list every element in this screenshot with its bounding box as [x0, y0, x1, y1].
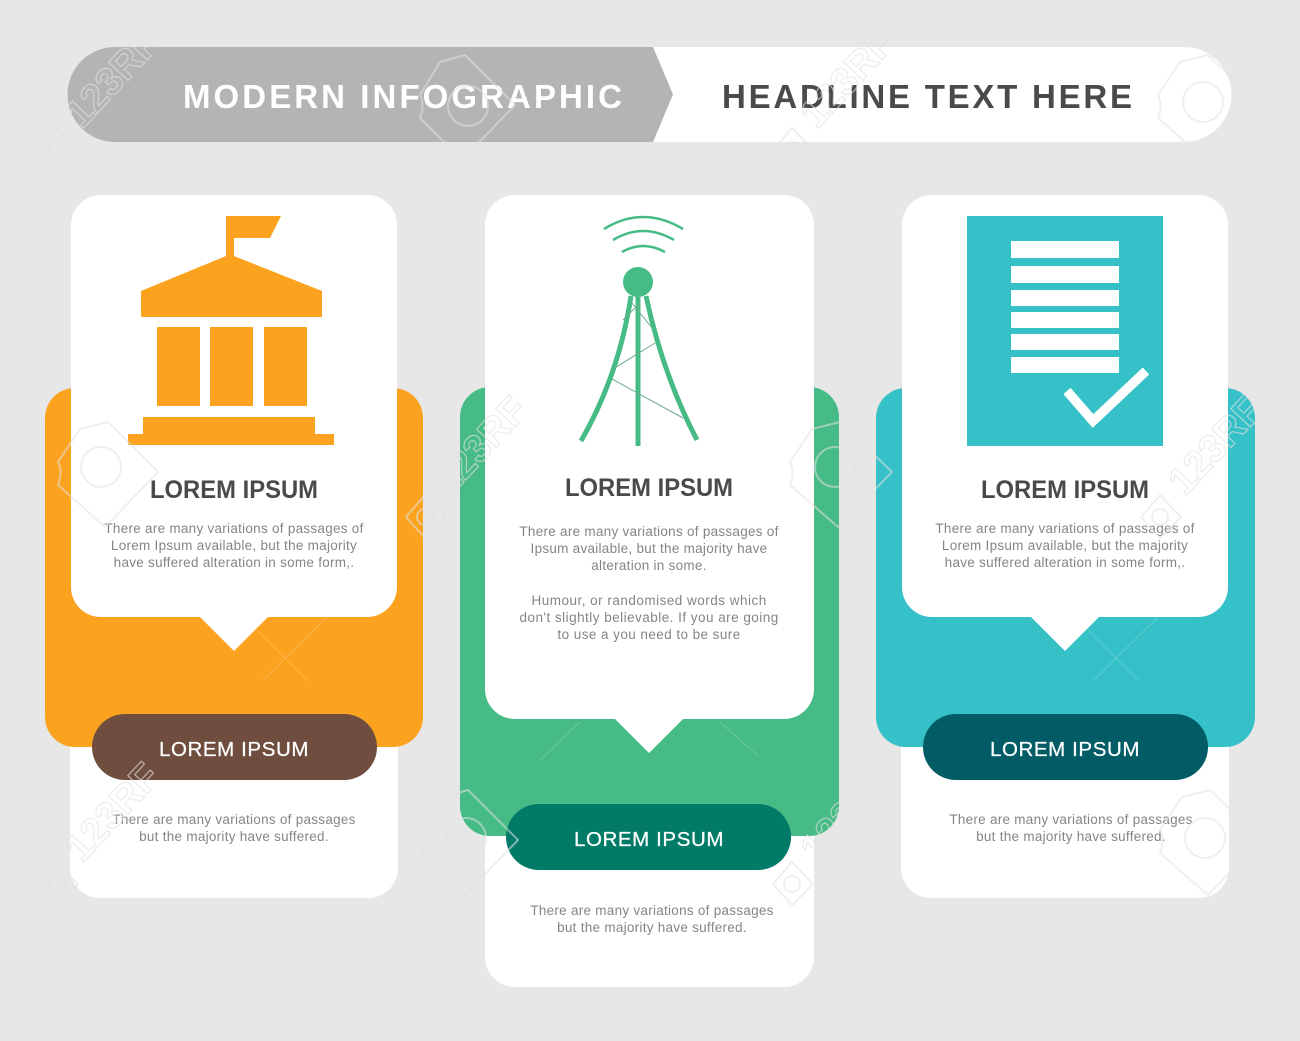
body text: don't slightly believable. If you are going — [520, 610, 778, 625]
lower white card — [485, 790, 814, 987]
header banner — [68, 47, 1232, 142]
body text — [519, 524, 779, 642]
lower white card — [70, 700, 398, 898]
lower text — [530, 903, 774, 935]
upper white callout card — [485, 195, 814, 753]
watermark overlay: 123RF — [792, 21, 903, 136]
lower white card — [901, 700, 1229, 898]
body text — [935, 521, 1195, 570]
header title right: HEADLINE TEXT HERE — [722, 78, 1132, 115]
heading: LOREM IPSUM — [981, 476, 1149, 504]
header title left: MODERN INFOGRAPHIC — [183, 78, 622, 115]
watermark overlay: 123RF — [57, 755, 168, 870]
body text: Humour, or randomised words which — [532, 593, 766, 608]
body text: alteration in some. — [591, 558, 707, 573]
upper white callout card — [71, 195, 397, 651]
lower text: but the majority have suffered. — [557, 920, 747, 935]
dark teal pill button — [923, 714, 1208, 780]
brown pill button — [92, 714, 377, 780]
lower text: There are many variations of passages — [112, 812, 356, 827]
watermark overlay: 123RF — [425, 388, 536, 503]
heading: LOREM IPSUM — [150, 476, 318, 504]
body text: There are many variations of passages of — [519, 524, 779, 539]
lower text — [112, 812, 356, 844]
lower text: but the majority have suffered. — [139, 829, 329, 844]
lower text: but the majority have suffered. — [976, 829, 1166, 844]
lower text: There are many variations of passages — [949, 812, 1193, 827]
watermark overlay: 123RF — [1160, 388, 1271, 503]
brown pill button: LOREM IPSUM — [159, 738, 309, 761]
panel: left column — [45, 195, 423, 898]
icon: radio tower with signal waves — [581, 217, 697, 446]
dark teal pill button: LOREM IPSUM — [990, 738, 1140, 761]
icon: government building with flag — [128, 216, 334, 445]
header left grey arrow pill — [68, 47, 673, 142]
watermark overlay: 123RF — [57, 21, 168, 136]
body text: Ipsum available, but the majority have — [531, 541, 767, 556]
icon: document with check mark — [967, 216, 1163, 446]
upper white callout card — [902, 195, 1228, 651]
body text: There are many variations of passages of — [104, 521, 364, 536]
dark green pill button: LOREM IPSUM — [574, 828, 724, 851]
panel: middle column — [460, 195, 839, 987]
panel: right column — [876, 195, 1255, 898]
dark green pill button — [506, 804, 791, 870]
lower text: There are many variations of passages — [530, 903, 774, 918]
header right white pill — [640, 47, 1232, 142]
green backing panel — [460, 387, 839, 836]
body text — [104, 521, 364, 570]
body text: have suffered alteration in some form,. — [945, 555, 1185, 570]
body text: There are many variations of passages of — [935, 521, 1195, 536]
heading: LOREM IPSUM — [565, 474, 733, 502]
body text: have suffered alteration in some form,. — [114, 555, 354, 570]
body text: Lorem Ipsum available, but the majority — [942, 538, 1188, 553]
orange backing panel — [45, 388, 423, 747]
body text: to use a you need to be sure — [558, 627, 740, 642]
teal backing panel — [876, 388, 1255, 747]
lower text — [949, 812, 1193, 844]
watermark overlay: 123RF — [792, 755, 903, 870]
body text: Lorem Ipsum available, but the majority — [111, 538, 357, 553]
